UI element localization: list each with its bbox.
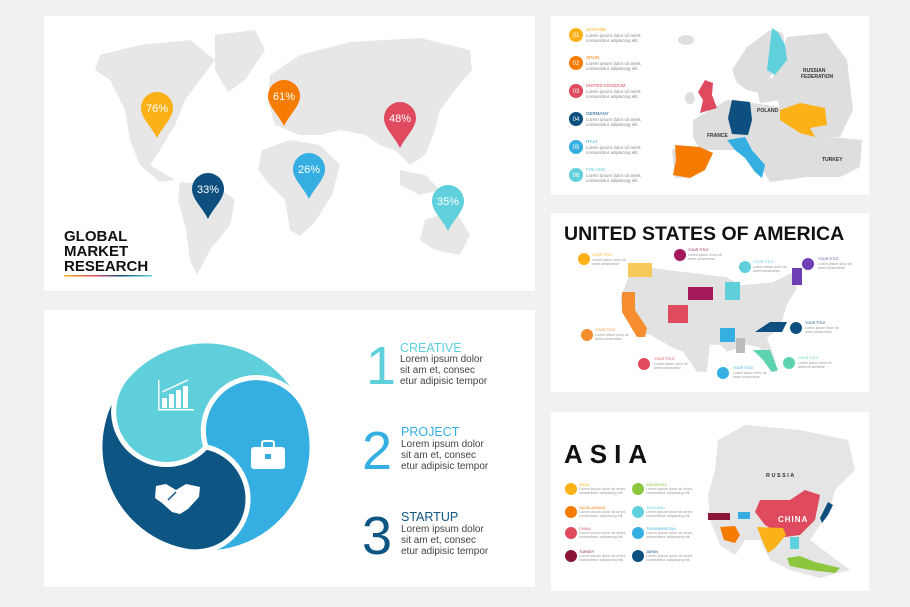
europe list: Lorem ipsum dolor sit amet, bbox=[586, 61, 642, 66]
world map bbox=[95, 30, 472, 275]
asia list: TURKMENISTAN bbox=[646, 527, 676, 531]
pin 26%: 26% bbox=[298, 164, 320, 176]
usa callouts: amet consectetur bbox=[733, 375, 761, 379]
step 3: sit am et, consec bbox=[401, 535, 476, 546]
usa callouts: Lorem ipsum dolor sit bbox=[592, 258, 625, 262]
panel: asia bbox=[551, 412, 869, 591]
europe list bbox=[569, 27, 642, 183]
europe list: UNITED KINGDOM bbox=[586, 83, 626, 88]
usa map bbox=[620, 263, 802, 372]
europe list: Lorem ipsum dolor sit amet, bbox=[586, 173, 642, 178]
asia map: RUSSIA bbox=[766, 473, 796, 479]
usa callouts: YOUR TITLE bbox=[753, 260, 774, 264]
pin 48% bbox=[384, 102, 416, 148]
europe list: 05 bbox=[573, 145, 580, 151]
panel: three step cycle bbox=[44, 310, 535, 587]
step 3 bbox=[362, 506, 489, 566]
asia list: Lorem ipsum dolor sit amet, bbox=[646, 510, 693, 514]
panel: europe bbox=[551, 16, 869, 195]
usa callouts: amet consectetur bbox=[688, 257, 716, 261]
europe list: consectetur adipiscing elit. bbox=[586, 150, 639, 155]
usa callouts: YOUR TITLE bbox=[595, 328, 616, 332]
usa callouts: amet consectetur bbox=[798, 365, 826, 369]
usa callouts: YOUR TITLE bbox=[654, 357, 675, 361]
europe list: Lorem ipsum dolor sit amet, bbox=[586, 117, 642, 122]
europe list: consectetur adipiscing elit. bbox=[586, 122, 639, 127]
asia list: consectetur adipiscing elit. bbox=[646, 491, 691, 495]
asia list: Lorem ipsum dolor sit amet, bbox=[579, 510, 626, 514]
usa callouts: YOUR TITLE bbox=[688, 248, 709, 252]
pin 33% bbox=[192, 173, 224, 219]
asia list bbox=[565, 483, 693, 562]
step 1: Lorem ipsum dolor bbox=[400, 354, 483, 365]
asia map: CHINA bbox=[778, 515, 808, 524]
step 2: 2 bbox=[362, 421, 392, 481]
europe map bbox=[672, 28, 862, 182]
usa callouts: YOUR TITLE bbox=[818, 257, 839, 261]
icon: chart bbox=[158, 380, 194, 410]
asia list: consectetur adipiscing elit. bbox=[646, 558, 691, 562]
step 3: etur adipisic tempor bbox=[401, 546, 489, 557]
step 3: STARTUP bbox=[401, 510, 458, 524]
europe list: consectetur adipiscing elit. bbox=[586, 38, 639, 43]
step 2: Lorem ipsum dolor bbox=[401, 439, 484, 450]
usa callouts: amet consectetur bbox=[595, 337, 623, 341]
asia list: consectetur adipiscing elit. bbox=[646, 535, 691, 539]
step 2: sit am et, consec bbox=[401, 450, 476, 461]
usa callouts: YOUR TITLE bbox=[592, 253, 613, 257]
europe list: Lorem ipsum dolor sit amet, bbox=[586, 33, 642, 38]
pin 76% bbox=[141, 92, 173, 138]
asia list: consectetur adipiscing elit. bbox=[579, 535, 624, 539]
title: asia: ASIA bbox=[564, 439, 654, 469]
title: global market research: RESEARCH bbox=[64, 258, 148, 275]
usa callouts: Lorem ipsum dolor sit bbox=[688, 253, 721, 257]
pin 61%: 61% bbox=[273, 91, 295, 103]
asia list: SAUDI ARABIA bbox=[579, 506, 606, 510]
title: global market research: MARKET bbox=[64, 243, 128, 260]
step 1: 1 bbox=[366, 336, 396, 396]
europe map: FEDERATION bbox=[801, 74, 834, 80]
title: usa: UNITED STATES OF AMERICA bbox=[564, 223, 844, 245]
usa callouts: YOUR TITLE bbox=[798, 356, 819, 360]
europe list: 06 bbox=[573, 173, 580, 179]
usa callouts: Lorem ipsum dolor sit bbox=[654, 362, 687, 366]
pin 35% bbox=[432, 185, 464, 231]
cycle diagram bbox=[100, 341, 312, 553]
step 1: sit am et, consec bbox=[400, 365, 475, 376]
title: global market research bbox=[64, 228, 152, 276]
europe map: RUSSIAN bbox=[803, 68, 826, 74]
panel: usa bbox=[551, 213, 869, 392]
europe list: 04 bbox=[573, 117, 580, 123]
europe map: POLAND bbox=[757, 108, 778, 114]
asia list: Lorem ipsum dolor sit amet, bbox=[646, 487, 693, 491]
usa callouts: Lorem ipsum dolor sit bbox=[733, 371, 766, 375]
usa callouts: Lorem ipsum dolor sit bbox=[818, 262, 851, 266]
asia list: consectetur adipiscing elit. bbox=[579, 514, 624, 518]
asia list: THAILAND bbox=[646, 506, 665, 510]
asia list: TURKEY bbox=[579, 550, 595, 554]
usa callouts: amet consectetur bbox=[805, 330, 833, 334]
europe list: 01 bbox=[573, 33, 580, 39]
step 2: PROJECT bbox=[401, 425, 460, 439]
europe list: Lorem ipsum dolor sit amet, bbox=[586, 89, 642, 94]
usa callouts: YOUR TITLE bbox=[733, 366, 754, 370]
usa callouts: YOUR TITLE bbox=[805, 321, 826, 325]
usa callouts: Lorem ipsum dolor sit bbox=[798, 361, 831, 365]
asia list: Lorem ipsum dolor sit amet, bbox=[579, 487, 626, 491]
europe map: TURKEY bbox=[822, 157, 843, 163]
asia list: Lorem ipsum dolor sit amet, bbox=[579, 554, 626, 558]
europe list: ITALY bbox=[586, 139, 598, 144]
europe list: consectetur adipiscing elit. bbox=[586, 178, 639, 183]
step 3: Lorem ipsum dolor bbox=[401, 524, 484, 535]
europe list: UKRAINE bbox=[586, 27, 606, 32]
step 1 bbox=[366, 336, 488, 396]
asia list: Lorem ipsum dolor sit amet, bbox=[579, 531, 626, 535]
step 2: etur adipisic tempor bbox=[401, 461, 489, 472]
europe list: GERMANY bbox=[586, 111, 609, 116]
asia list: Lorem ipsum dolor sit amet, bbox=[646, 531, 693, 535]
pin 76%: 76% bbox=[146, 103, 168, 115]
europe list: SPAIN bbox=[586, 55, 599, 60]
europe map: FRANCE bbox=[707, 133, 728, 139]
pin 61% bbox=[268, 80, 300, 126]
step 3: 3 bbox=[362, 506, 392, 566]
europe list: 02 bbox=[573, 61, 580, 67]
usa callouts: amet consectetur bbox=[818, 266, 846, 270]
usa callouts: amet consectetur bbox=[654, 366, 682, 370]
usa callouts bbox=[578, 248, 851, 379]
pin 33%: 33% bbox=[197, 184, 219, 196]
europe list: consectetur adipiscing elit. bbox=[586, 94, 639, 99]
asia map bbox=[708, 425, 855, 578]
step 1: etur adipisic tempor bbox=[400, 376, 488, 387]
usa callouts: Lorem ipsum dolor sit bbox=[753, 265, 786, 269]
usa callouts: amet consectetur bbox=[753, 269, 781, 273]
asia list: Lorem ipsum dolor sit amet, bbox=[646, 554, 693, 558]
panel: global market research bbox=[44, 16, 535, 291]
usa callouts: amet consectetur bbox=[592, 262, 620, 266]
step 2 bbox=[362, 421, 489, 481]
asia list: INDIA bbox=[579, 483, 590, 487]
pin 48%: 48% bbox=[389, 113, 411, 125]
usa callouts: Lorem ipsum dolor sit bbox=[595, 333, 628, 337]
asia list: consectetur adipiscing elit. bbox=[579, 491, 624, 495]
icon: briefcase bbox=[251, 441, 285, 469]
asia list: CHINA bbox=[579, 527, 591, 531]
europe list: FINLAND bbox=[586, 167, 606, 172]
asia list: consectetur adipiscing elit. bbox=[579, 558, 624, 562]
europe list: 03 bbox=[573, 89, 580, 95]
usa callouts: Lorem ipsum dolor sit bbox=[805, 326, 838, 330]
pin 26% bbox=[293, 153, 325, 199]
asia list: JAPAN bbox=[646, 550, 658, 554]
title: global market research: GLOBAL bbox=[64, 228, 127, 245]
icon: handshake bbox=[155, 484, 200, 514]
europe list: Lorem ipsum dolor sit amet, bbox=[586, 145, 642, 150]
pin 35%: 35% bbox=[437, 196, 459, 208]
europe list: consectetur adipiscing elit. bbox=[586, 66, 639, 71]
step 1: CREATIVE bbox=[400, 341, 462, 355]
asia list: INDONESIA bbox=[646, 483, 667, 487]
asia list: consectetur adipiscing elit. bbox=[646, 514, 691, 518]
